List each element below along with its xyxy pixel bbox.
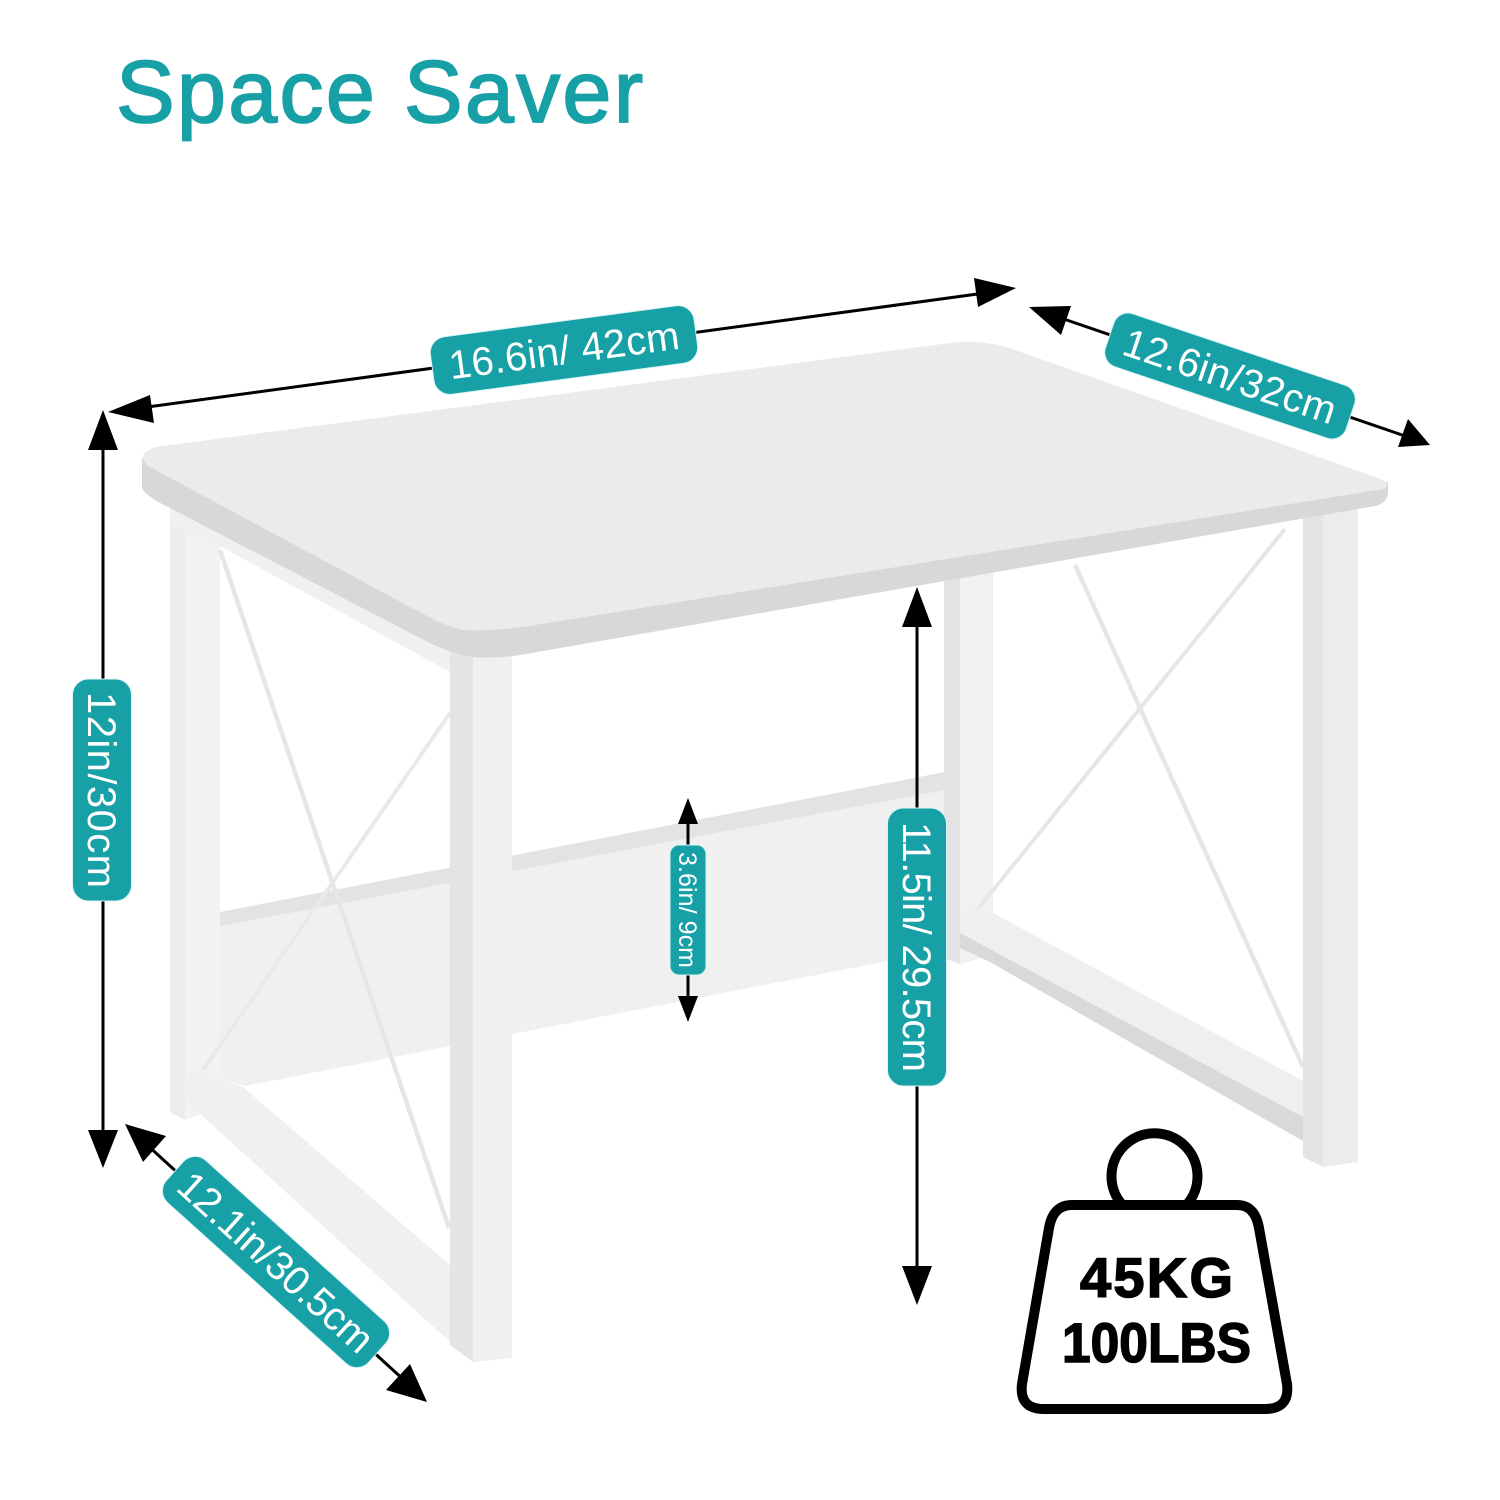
dimension: total height 12in/30cm	[72, 410, 132, 1168]
weight text 45KG: 45KG	[1080, 1246, 1233, 1309]
table top surface	[143, 342, 1387, 630]
weight handle	[1112, 1133, 1198, 1205]
dimension: total height 12in/30cm: 12in/30cm	[79, 692, 123, 888]
dimension: width 16.6in/42cm	[108, 278, 1016, 423]
desk illustration	[142, 342, 1388, 1362]
back left leg	[170, 500, 220, 1120]
dimension: base depth 12.1in/30.5cm: 12.1in/30.5cm	[168, 1163, 382, 1362]
back crossbar panel	[200, 772, 960, 1086]
dimension: base depth 12.1in/30.5cm	[125, 1124, 427, 1402]
left side frame	[170, 500, 450, 1342]
dimension: width 16.6in/42cm: 16.6in/ 42cm	[446, 314, 682, 388]
dimension: panel height 3.6in/9cm: 3.6in/ 9cm	[673, 852, 701, 968]
dimension: depth 12.6in/32cm	[1029, 306, 1430, 447]
dimension: clearance 11.5in/29.5cm: 11.5in/ 29.5cm	[894, 822, 938, 1072]
dimension: panel height 3.6in/9cm	[670, 798, 706, 1022]
title: Space Saver	[116, 42, 643, 141]
back right leg	[944, 560, 993, 964]
front left leg	[450, 650, 512, 1362]
front right leg	[1303, 500, 1358, 1167]
right side frame	[960, 529, 1303, 1141]
weight text 100LBS: 100LBS	[1062, 1311, 1251, 1374]
weight body	[1022, 1205, 1287, 1409]
icon: weight capacity	[1022, 1133, 1287, 1409]
dimension: clearance 11.5in/29.5cm	[888, 587, 946, 1305]
dimension: depth 12.6in/32cm: 12.6in/32cm	[1117, 321, 1342, 433]
table top edge	[142, 458, 1388, 658]
